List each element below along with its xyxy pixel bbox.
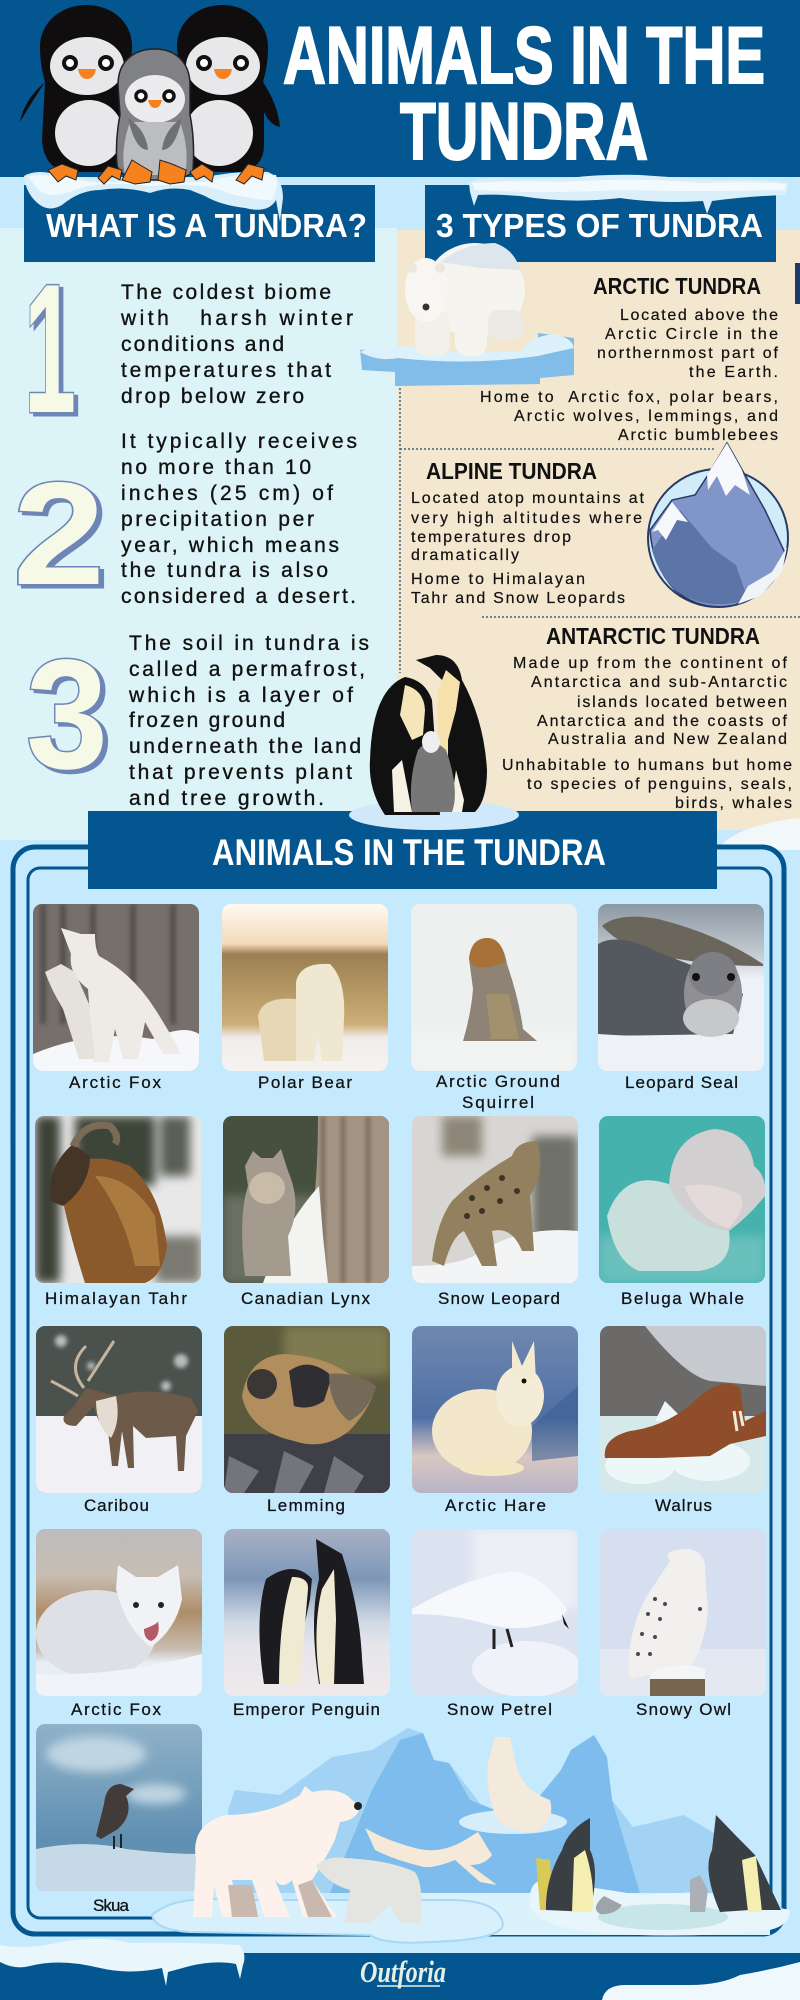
label: Arctic Ground — [436, 1072, 560, 1091]
label: Leopard Seal — [625, 1073, 738, 1092]
icon: snow on right heading — [469, 175, 788, 214]
number 2: 2 — [13, 452, 105, 615]
text block: point 1: drop below zero — [121, 385, 304, 408]
heading: animals in the tundra: ANIMALS IN THE TUNDRA — [212, 832, 606, 873]
text block: point 2: precipitation per — [121, 508, 314, 531]
card: skua — [36, 1724, 202, 1891]
label: Squirrel — [462, 1093, 534, 1112]
icon: penguin feet — [48, 160, 264, 184]
label: Beluga Whale — [621, 1289, 744, 1308]
text block: antarctic tundra: ANTARCTIC TUNDRA — [546, 623, 760, 649]
icon: footer snow left — [0, 1939, 244, 1986]
penguins left group — [536, 1818, 622, 1914]
text block: point 3: The soil in tundra is — [129, 632, 369, 655]
card: arctic hare — [412, 1326, 578, 1493]
text block: alpine tundra: temperatures drop — [411, 529, 571, 546]
label: Emperor Penguin — [233, 1700, 380, 1719]
text block: antarctic tundra: birds, whales — [675, 795, 792, 812]
text block: point 2: It typically receives — [121, 430, 357, 453]
label: Arctic Hare — [445, 1496, 546, 1515]
card: emperor penguin — [224, 1529, 390, 1696]
label — [436, 1072, 560, 1112]
card: snow petrel — [412, 1529, 582, 1697]
panel: what is a tundra background — [0, 228, 397, 840]
text block: point 1: temperatures that — [121, 359, 331, 382]
iceberg shading — [330, 1733, 640, 1893]
text block: arctic tundra: Arctic bumblebees — [618, 427, 778, 444]
iceberg — [228, 1728, 714, 1893]
text block: arctic tundra: Arctic wolves, lemmings, and — [514, 408, 778, 425]
label: Canadian Lynx — [241, 1289, 370, 1308]
heading: what is a tundra — [24, 185, 375, 262]
label: Caribou — [84, 1496, 149, 1515]
text block: alpine tundra: dramatically — [411, 547, 519, 564]
text block: arctic tundra — [480, 273, 779, 444]
label: Snow Petrel — [447, 1700, 552, 1719]
text block: alpine tundra — [411, 458, 645, 607]
text block: point 2: the tundra is also — [121, 559, 328, 582]
text block: point 2 — [121, 430, 357, 608]
label: Skua — [93, 1896, 130, 1915]
label: Arctic Fox — [69, 1073, 162, 1092]
text block: antarctic tundra: Antarctica and the coasts of — [537, 713, 788, 730]
icon: cartoon penguin family — [20, 5, 280, 184]
snow patch behind the band — [717, 818, 800, 850]
text block: point 2: no more than 10 — [121, 456, 311, 479]
label: Polar Bear — [258, 1073, 352, 1092]
label: Arctic Fox — [71, 1700, 162, 1719]
label: Snow Leopard — [438, 1289, 560, 1308]
text block: antarctic tundra: Made up from the continent of — [513, 655, 788, 672]
panel: 3 types of tundra background — [397, 230, 800, 830]
text block: point 3: which is a layer of — [128, 684, 353, 707]
icon: snow on left heading — [24, 172, 283, 222]
dotted dividers — [400, 380, 800, 673]
heading: what is a tundra: WHAT IS A TUNDRA? — [46, 207, 367, 244]
penguin: right adult — [177, 5, 280, 172]
number 3: 3 — [26, 628, 108, 802]
text block: arctic tundra: Home to Arctic fox, polar bears, — [480, 389, 778, 406]
text block: alpine tundra: Tahr and Snow Leopards — [411, 590, 625, 607]
text block: antarctic tundra: Unhabitable to humans but home — [502, 757, 792, 774]
label: Lemming — [267, 1496, 345, 1515]
card: caribou — [36, 1326, 202, 1493]
text block: arctic tundra: Arctic Circle in the — [605, 326, 778, 343]
text block: point 3: frozen ground — [129, 709, 285, 732]
text block: alpine tundra: ALPINE TUNDRA — [426, 458, 597, 484]
card: snow leopard — [412, 1116, 578, 1283]
text block: point 1 — [120, 281, 353, 408]
number 1: 1 — [24, 245, 76, 451]
card: arctic wolves — [33, 904, 199, 1071]
icon: polar bear on ice floe — [360, 243, 574, 386]
card: arctic ground squirrel — [411, 904, 577, 1071]
card: canadian lynx — [223, 1116, 389, 1283]
text block: arctic tundra: ARCTIC TUNDRA — [593, 273, 761, 299]
title — [283, 11, 765, 177]
card: himalayan tahr — [35, 1116, 201, 1283]
footer band — [0, 1953, 800, 2000]
card: snowy owl — [600, 1529, 766, 1696]
text block: point 3: called a permafrost, — [129, 658, 365, 681]
running fox — [365, 1828, 497, 1885]
text block: point 3: that prevents plant — [129, 761, 352, 784]
label: Walrus — [655, 1496, 712, 1515]
text block: point 3: underneath the land — [129, 735, 361, 758]
heading: 3 types of tundra: 3 TYPES OF TUNDRA — [436, 207, 763, 244]
penguin: left adult — [20, 5, 132, 172]
text block: arctic tundra: Located above the — [620, 307, 778, 324]
sitting fox on floe — [459, 1737, 567, 1834]
label: Snowy Owl — [636, 1700, 731, 1719]
heading: animals in the tundra — [88, 811, 717, 889]
illustration: iceberg scene — [152, 1728, 790, 1943]
penguin: grey chick — [116, 49, 194, 180]
heading: 3 types of tundra — [425, 185, 776, 262]
text block: point 1: with harsh winter — [120, 307, 353, 330]
header band — [0, 0, 800, 177]
edge mark — [795, 263, 800, 304]
label: Himalayan Tahr — [45, 1289, 187, 1308]
text block: point 3 — [128, 632, 369, 810]
logo: Outforia: Outforia — [360, 1954, 446, 1989]
text block: alpine tundra: very high altitudes where — [411, 510, 642, 527]
text block: alpine tundra: Located atop mountains at — [411, 490, 645, 507]
text block: alpine tundra: Home to Himalayan — [411, 571, 585, 588]
polar bear — [405, 243, 525, 356]
polar bear adult — [193, 1786, 362, 1917]
icon: footer snow right — [602, 1962, 800, 2000]
icon: emperor penguin family — [349, 655, 519, 830]
water — [598, 1904, 728, 1930]
icon: mountain globe — [648, 443, 788, 607]
ice floe — [360, 333, 574, 386]
card: walrus — [600, 1326, 766, 1493]
text block: point 3: and tree growth. — [129, 787, 324, 810]
big ice floe — [152, 1899, 503, 1943]
card: arctic fox — [36, 1529, 202, 1696]
text block: antarctic tundra: Australia and New Zealand — [548, 731, 787, 748]
text block: arctic tundra: the Earth. — [689, 364, 778, 381]
polar bear cub — [316, 1858, 422, 1923]
card: polar bear — [222, 904, 388, 1071]
text block: arctic tundra: northernmost part of — [597, 345, 779, 362]
text block: point 1: The coldest biome — [121, 281, 331, 304]
text block: point 2: considered a desert. — [121, 585, 356, 608]
text block: point 2: inches (25 cm) of — [121, 482, 333, 505]
snow ground — [395, 1893, 770, 1935]
penguins right group — [690, 1815, 781, 1912]
text block: point 2: year, which means — [121, 534, 339, 557]
card: lemming — [224, 1326, 390, 1493]
text block: antarctic tundra — [502, 623, 792, 812]
title: TUNDRA — [400, 87, 648, 177]
card: leopard seal — [598, 904, 764, 1071]
text block: antarctic tundra: islands located between — [577, 694, 787, 711]
text block: point 1: conditions and — [121, 333, 284, 356]
text block: antarctic tundra: to species of penguins, seals, — [527, 776, 792, 793]
text block: antarctic tundra: Antarctica and sub-Antarctic — [531, 674, 787, 691]
gallery frame — [13, 847, 784, 1934]
card: beluga whale — [599, 1116, 765, 1283]
right ice floe — [530, 1880, 790, 1936]
